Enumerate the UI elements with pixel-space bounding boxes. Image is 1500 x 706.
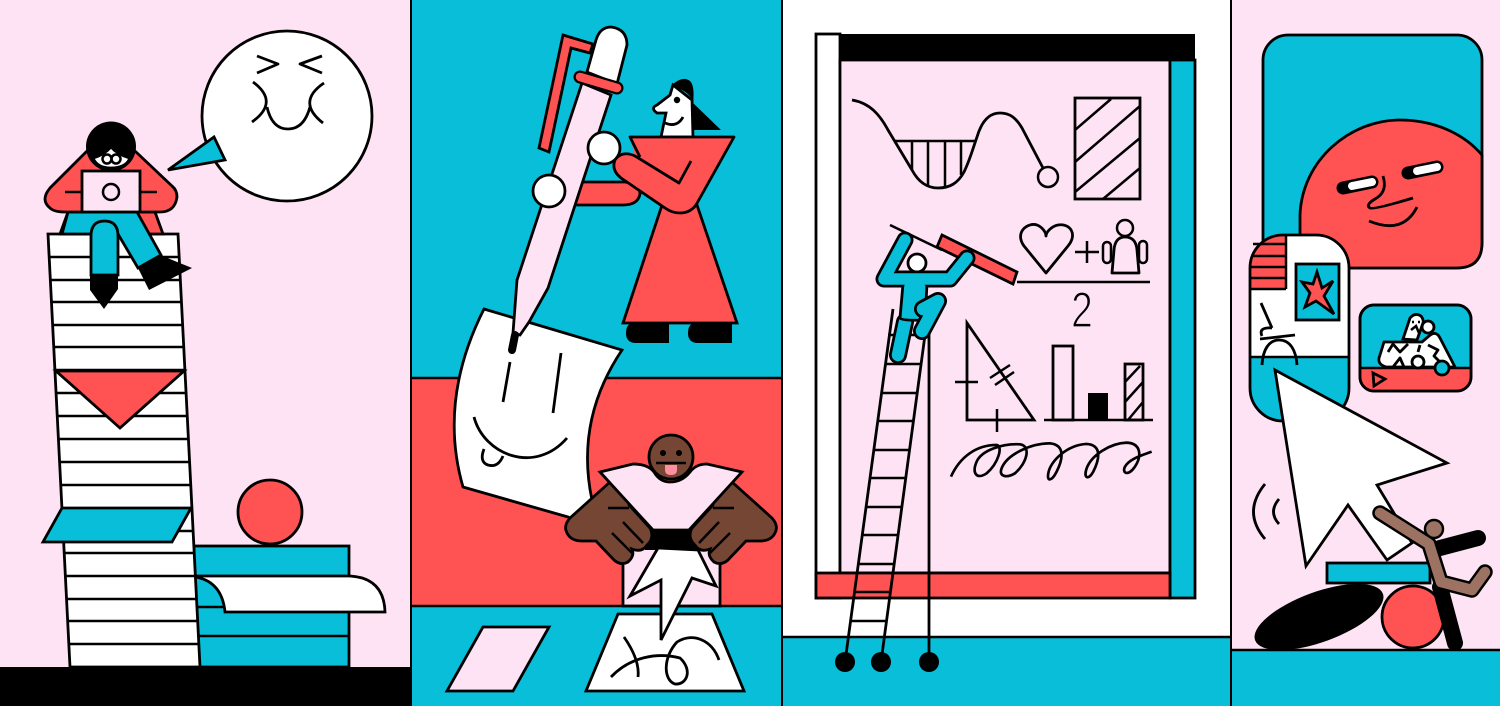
large blue window with red face	[1263, 35, 1482, 268]
torn paper shard	[630, 548, 716, 640]
ladder and rods	[835, 309, 939, 672]
floor: black	[0, 667, 410, 706]
panel: screens and cursor	[1232, 0, 1500, 706]
video player card	[1360, 305, 1471, 391]
falling figure	[1380, 513, 1485, 643]
paper sheet on books	[196, 576, 385, 612]
black ellipse	[1247, 570, 1391, 664]
panel: pen and torn paper	[411, 0, 781, 706]
hatched rectangle	[1075, 98, 1140, 199]
floor: blue	[782, 637, 1230, 706]
red ball	[1382, 586, 1444, 648]
blue parallelogram sheet	[43, 508, 191, 542]
panel: person on paper stack	[0, 0, 410, 706]
red ball on books	[238, 480, 302, 544]
board frame and surface	[816, 34, 1195, 598]
formula: heart plus person over 2: 2	[1071, 281, 1093, 338]
blue plank	[1327, 563, 1430, 583]
triangle diagram	[955, 323, 1034, 432]
paper stack	[48, 234, 200, 667]
pen	[512, 27, 627, 350]
cursor arrow	[1275, 370, 1447, 566]
hands on pen	[533, 132, 620, 207]
bottom paper with scribble	[586, 614, 744, 691]
blue book stack	[194, 546, 349, 667]
curve chart	[852, 100, 1058, 188]
panel: blackboard	[782, 0, 1230, 706]
person tearing paper	[566, 435, 776, 606]
speech bubble face	[168, 31, 372, 201]
tall card with poster	[1250, 235, 1349, 421]
red envelope triangle	[56, 371, 184, 428]
climber holding ruler	[884, 225, 1017, 355]
woman	[575, 79, 737, 343]
sound arcs	[1254, 484, 1279, 539]
scribble line	[951, 443, 1152, 479]
big paper with smiling face	[454, 309, 622, 530]
formula: heart plus person over 2	[1017, 220, 1150, 338]
panel dividers	[410, 0, 1232, 706]
bar chart	[1044, 346, 1153, 420]
pink parallelogram sheet	[447, 627, 549, 691]
person with laptop	[45, 122, 192, 309]
